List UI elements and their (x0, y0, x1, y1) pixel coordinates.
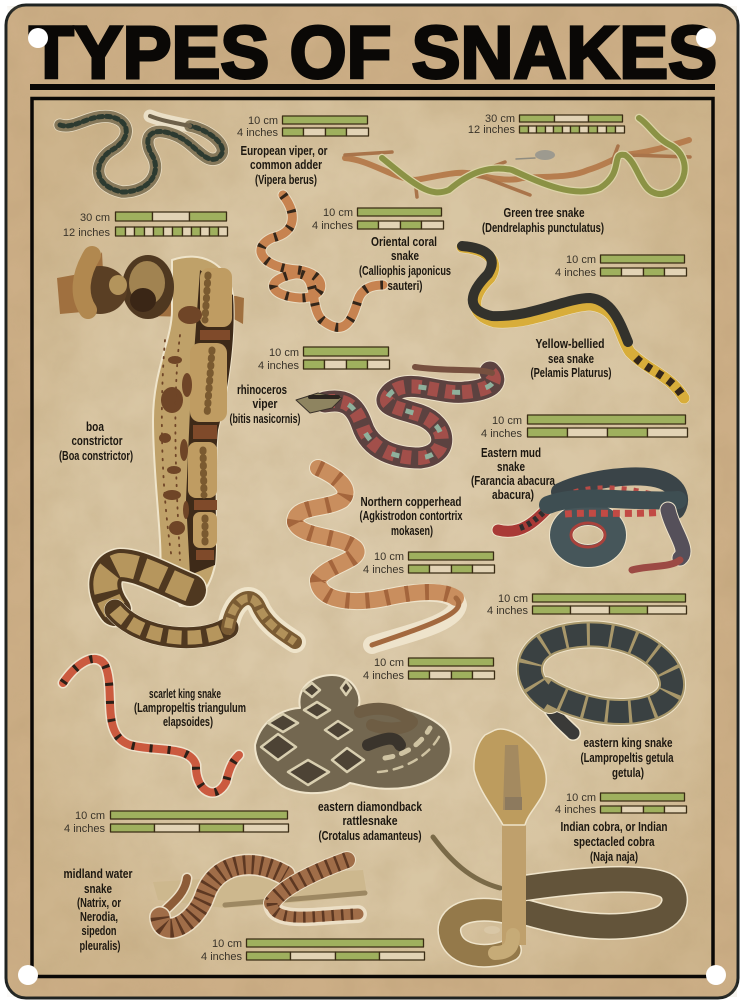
label: pleuralis) (80, 938, 120, 953)
label: rhinoceros (237, 382, 287, 397)
label (360, 494, 463, 538)
upper coils (122, 255, 174, 319)
scale bar: 10 cm (566, 254, 596, 266)
scale bar: 10 cm (212, 938, 242, 950)
scale bar (312, 207, 444, 232)
label: (bitis nasicornis) (230, 411, 300, 426)
species: scarlet king snake (63, 659, 288, 835)
label (240, 143, 328, 187)
scale bar: 10 cm (566, 792, 596, 804)
label: sauteri) (388, 278, 422, 293)
label: getula) (612, 765, 644, 780)
scale bar: 4 inches (555, 267, 596, 279)
label: (Dendrelaphis punctulatus) (482, 220, 604, 235)
label: scarlet king snake (149, 686, 221, 701)
label: (Naja naja) (590, 849, 638, 864)
illustration: mud snake (498, 476, 683, 570)
scale bar (237, 115, 368, 139)
scale bar (555, 254, 686, 279)
illustration: branch with green snake and mouse (345, 118, 690, 197)
label (230, 382, 300, 426)
species: northern copperhead (295, 468, 494, 645)
scale bar (63, 212, 228, 239)
scale bar: 10 cm (75, 810, 105, 822)
scale bar: 4 inches (201, 951, 242, 963)
label: abacura) (492, 487, 534, 502)
scale bar (201, 938, 424, 963)
scale bar (363, 657, 494, 682)
label: eastern king snake (584, 735, 672, 750)
scale bar: 4 inches (312, 220, 353, 232)
label (59, 419, 133, 463)
illustration: viper (60, 116, 222, 192)
label: eastern diamondback (318, 799, 423, 814)
title rule (30, 84, 715, 90)
title: TYPES OF SNAKES (29, 11, 717, 94)
illustration: coral snake (261, 195, 383, 327)
species: Indian cobra (433, 729, 686, 956)
label: Nerodia, (80, 909, 118, 924)
label (471, 445, 556, 502)
scale bar (481, 415, 688, 440)
lower coil (105, 565, 190, 610)
side spots (159, 306, 202, 535)
label: Northern copperhead (360, 494, 462, 509)
illustration: sea snake (462, 246, 684, 398)
scale bar: 4 inches (237, 127, 278, 139)
species: rhinoceros viper (230, 347, 494, 458)
illustration: rattlesnake (255, 675, 451, 793)
label: (Pelamis Platurus) (530, 365, 612, 380)
label: elapsoides) (163, 714, 213, 729)
label: (Natrix, or (77, 895, 121, 910)
scale bar: 4 inches (363, 564, 404, 576)
scale bar: 4 inches (363, 670, 404, 682)
label: (Farancia abacura (471, 473, 556, 488)
scale bar: 12 inches (63, 227, 110, 239)
species: oriental coral snake (261, 195, 451, 327)
label: snake (497, 459, 525, 474)
scale bar: 4 inches (258, 360, 299, 372)
scale bar (487, 593, 686, 617)
label: rattlesnake (342, 813, 398, 828)
illustration: copperhead (295, 468, 459, 645)
label: Indian cobra, or Indian (560, 819, 668, 834)
label (134, 686, 246, 729)
scale bar: 10 cm (248, 115, 278, 127)
label: (Lampropeltis triangulum (134, 700, 246, 715)
scale bar (64, 810, 288, 835)
label: sipedon (82, 923, 117, 938)
column outline (153, 257, 234, 606)
scale bar (468, 113, 624, 136)
illustration: cobra (433, 729, 675, 956)
label (530, 336, 612, 380)
scale bar (555, 792, 686, 816)
label: Green tree snake (504, 205, 584, 220)
species: boa constrictor (57, 212, 295, 642)
label (359, 234, 451, 293)
label: boa (86, 419, 105, 434)
scale bar: 10 cm (498, 593, 528, 605)
label: snake (84, 881, 112, 896)
species: green tree snake (345, 113, 690, 235)
scale bar: 4 inches (555, 804, 596, 816)
label: European viper, or (240, 143, 328, 158)
branch (57, 252, 244, 324)
scale bar: 10 cm (323, 207, 353, 219)
scale bar: 12 inches (468, 124, 515, 136)
illustration: rhinoceros viper (296, 367, 494, 458)
label: (Agkistrodon contortrix (360, 508, 463, 523)
label: midland water (64, 866, 132, 881)
label (64, 866, 132, 953)
label: sea snake (548, 351, 594, 366)
label: spectacled cobra (574, 834, 655, 849)
scale bar (258, 347, 390, 372)
species: eastern king snake (487, 593, 686, 780)
species: midland water snake (64, 860, 424, 963)
species: European viper (60, 115, 368, 192)
scale bar: 4 inches (64, 823, 105, 835)
scale bar: 10 cm (492, 415, 522, 427)
illustration: scarlet king snake (63, 659, 239, 792)
illustration: boa (57, 252, 295, 642)
scale bar: 4 inches (487, 605, 528, 617)
illustration: water snake on branch (153, 860, 367, 928)
label: (Lampropeltis getula (580, 750, 674, 765)
illustration: king snake (530, 634, 672, 733)
label (318, 799, 423, 843)
scale bar: 10 cm (374, 551, 404, 563)
label: Yellow-bellied (536, 336, 605, 351)
species: yellow-bellied sea snake (462, 246, 686, 398)
scale bar (363, 551, 494, 576)
label: mokasen) (391, 523, 433, 538)
back blocks (188, 268, 232, 548)
label: common adder (250, 157, 322, 172)
species: eastern mud snake (471, 415, 688, 570)
label: Eastern mud (481, 445, 541, 460)
label: viper (252, 396, 278, 411)
label: (Vipera berus) (255, 172, 317, 187)
inner parchment panel (32, 99, 713, 976)
scale bar: 30 cm (80, 212, 110, 224)
label (560, 819, 668, 864)
label: (Crotalus adamanteus) (318, 828, 422, 843)
scale bar: 10 cm (269, 347, 299, 359)
scale bar: 30 cm (485, 113, 515, 125)
label: (Boa constrictor) (59, 448, 133, 463)
label: Oriental coral (371, 234, 437, 249)
species: eastern diamondback rattlesnake (255, 657, 494, 843)
scale bar: 4 inches (481, 428, 522, 440)
scale bar: 10 cm (374, 657, 404, 669)
label (580, 735, 674, 780)
label: constrictor (72, 433, 122, 448)
label: (Calliophis japonicus (359, 263, 451, 278)
label: snake (391, 248, 419, 263)
label (482, 205, 604, 235)
